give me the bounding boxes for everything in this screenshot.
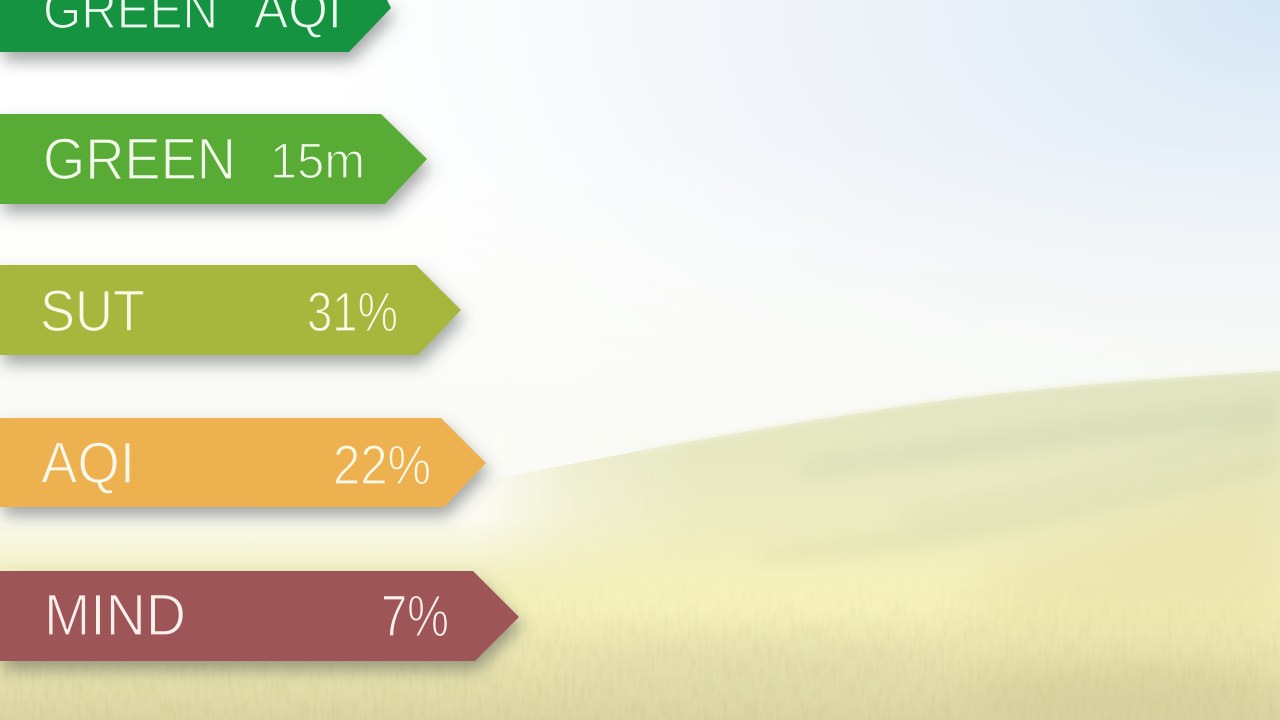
label: AQI: AQI <box>41 431 135 496</box>
arrow: GREEN AQI <box>0 0 391 52</box>
value: 15m: 15m <box>270 133 365 189</box>
arrow: SUT 31% <box>0 265 461 355</box>
arrow: MIND 7% <box>0 571 519 661</box>
arrow: AQI 22% <box>0 418 486 507</box>
value: 31%: 31% <box>307 280 398 343</box>
arrow: GREEN 15m <box>0 114 427 204</box>
label: MIND: MIND <box>44 583 186 648</box>
label: SUT: SUT <box>40 279 145 344</box>
value: 7%: 7% <box>381 584 449 649</box>
label: GREEN: GREEN <box>43 127 236 192</box>
background: meadow and hill <box>0 371 1280 720</box>
value: 22%: 22% <box>333 433 431 496</box>
